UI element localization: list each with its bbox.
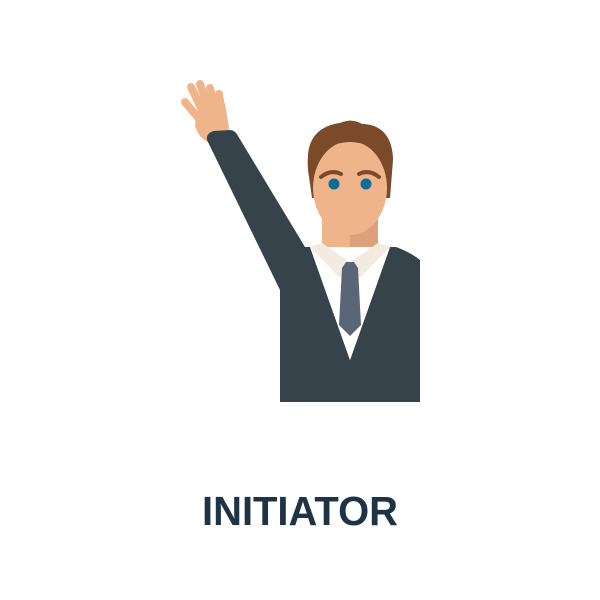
eyebrows [321, 172, 341, 177]
icon: raised hand [185, 84, 228, 142]
shirt [310, 247, 390, 360]
tie [339, 262, 361, 336]
neck [322, 215, 378, 263]
hair [308, 121, 393, 198]
face [313, 141, 387, 235]
figure: initiator raising hand [185, 84, 420, 402]
title: INITIATOR [202, 488, 398, 534]
collar [310, 243, 350, 278]
suit: arm and body [207, 130, 420, 402]
head [308, 121, 393, 235]
hairline [308, 121, 393, 180]
eyes [328, 178, 340, 190]
